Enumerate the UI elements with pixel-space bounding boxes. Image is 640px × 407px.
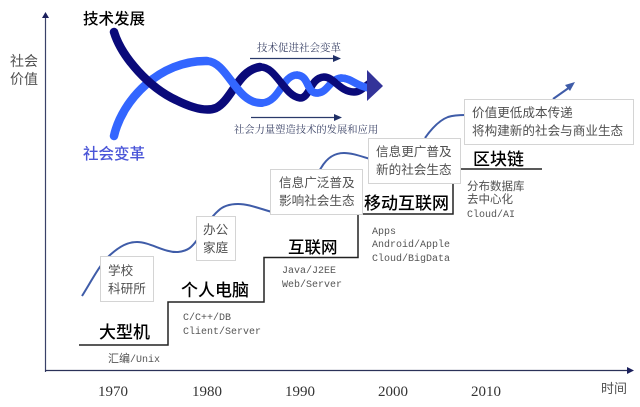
- year labels: 1980: [192, 384, 222, 400]
- callout: information spread: [270, 170, 362, 214]
- year labels: 1990: [285, 384, 315, 400]
- era: personal computer: 个人电脑: [181, 281, 249, 300]
- heading: social change: 社会变革: [83, 144, 145, 163]
- y axis label: [10, 53, 38, 87]
- arrow: society shapes technology: [234, 114, 378, 136]
- era: blockchain: 区块链: [473, 150, 524, 169]
- callout: value transfer at lower cost: [464, 100, 634, 144]
- year labels: 2010: [471, 384, 501, 400]
- y axis arrow: [42, 12, 49, 372]
- era: internet: [282, 238, 342, 291]
- x axis arrow: [45, 367, 634, 374]
- callout: value transfer at lower cost: 将构建新的社会与商业生态: [472, 123, 624, 138]
- x axis label: 时间: [601, 381, 627, 396]
- callout: office and home: 办公: [203, 223, 229, 237]
- era: personal computer: [181, 281, 261, 338]
- era: mobile internet: [364, 194, 450, 265]
- arrow: technology promotes social change: 技术促进社会变革: [257, 41, 341, 54]
- callout: information spread: 信息广泛普及: [279, 175, 355, 190]
- helix arrowhead: [367, 70, 383, 101]
- y axis label: 价值: [10, 71, 38, 87]
- era: blockchain: 分布数据库: [467, 179, 524, 193]
- callout: more widespread information: 信息更广普及: [376, 144, 452, 159]
- arrow: technology promotes social change: [250, 41, 341, 62]
- callout: more widespread information: [368, 138, 460, 184]
- callout: school and research: 科研所: [108, 282, 146, 296]
- era: blockchain: Cloud/AI: [467, 209, 515, 221]
- era: mainframe: 汇编/Unix: [108, 351, 160, 366]
- heading: technology development: 技术发展: [83, 10, 145, 28]
- callout: office and home: [196, 216, 236, 260]
- era: internet: Java/J2EE: [282, 265, 336, 277]
- era: personal computer: Client/Server: [183, 326, 261, 338]
- staircase: technology eras: [79, 169, 542, 345]
- era: blockchain: [467, 150, 524, 221]
- era: internet: Web/Server: [282, 279, 342, 291]
- era: mobile internet: Apps: [372, 227, 396, 238]
- year labels: 2000: [378, 384, 408, 400]
- era: mainframe: 大型机: [99, 323, 150, 342]
- callout: information spread: 影响社会生态: [279, 193, 355, 208]
- callout: school and research: 学校: [108, 263, 134, 278]
- era: blockchain: 去中心化: [467, 192, 513, 206]
- era: mobile internet: 移动互联网: [364, 194, 449, 213]
- callout: school and research: [100, 256, 154, 302]
- year labels: [98, 384, 501, 400]
- era: mainframe: [99, 323, 160, 366]
- era: personal computer: C/C++/DB: [183, 312, 231, 324]
- callout: more widespread information: 新的社会生态: [376, 162, 452, 177]
- era: mobile internet: Cloud/BigData: [372, 253, 450, 265]
- arrow: society shapes technology: 社会力量塑造技术的发展和应用: [234, 123, 378, 136]
- year labels: 1970: [98, 384, 128, 400]
- era: internet: 互联网: [288, 238, 338, 257]
- social value curve: [82, 82, 575, 296]
- callout: value transfer at lower cost: 价值更低成本传递: [472, 105, 573, 120]
- helix: technology and society intertwined: [114, 32, 372, 136]
- callout: office and home: 家庭: [203, 240, 229, 255]
- y axis label: 社会: [10, 53, 38, 69]
- era: mobile internet: Android/Apple: [372, 239, 450, 251]
